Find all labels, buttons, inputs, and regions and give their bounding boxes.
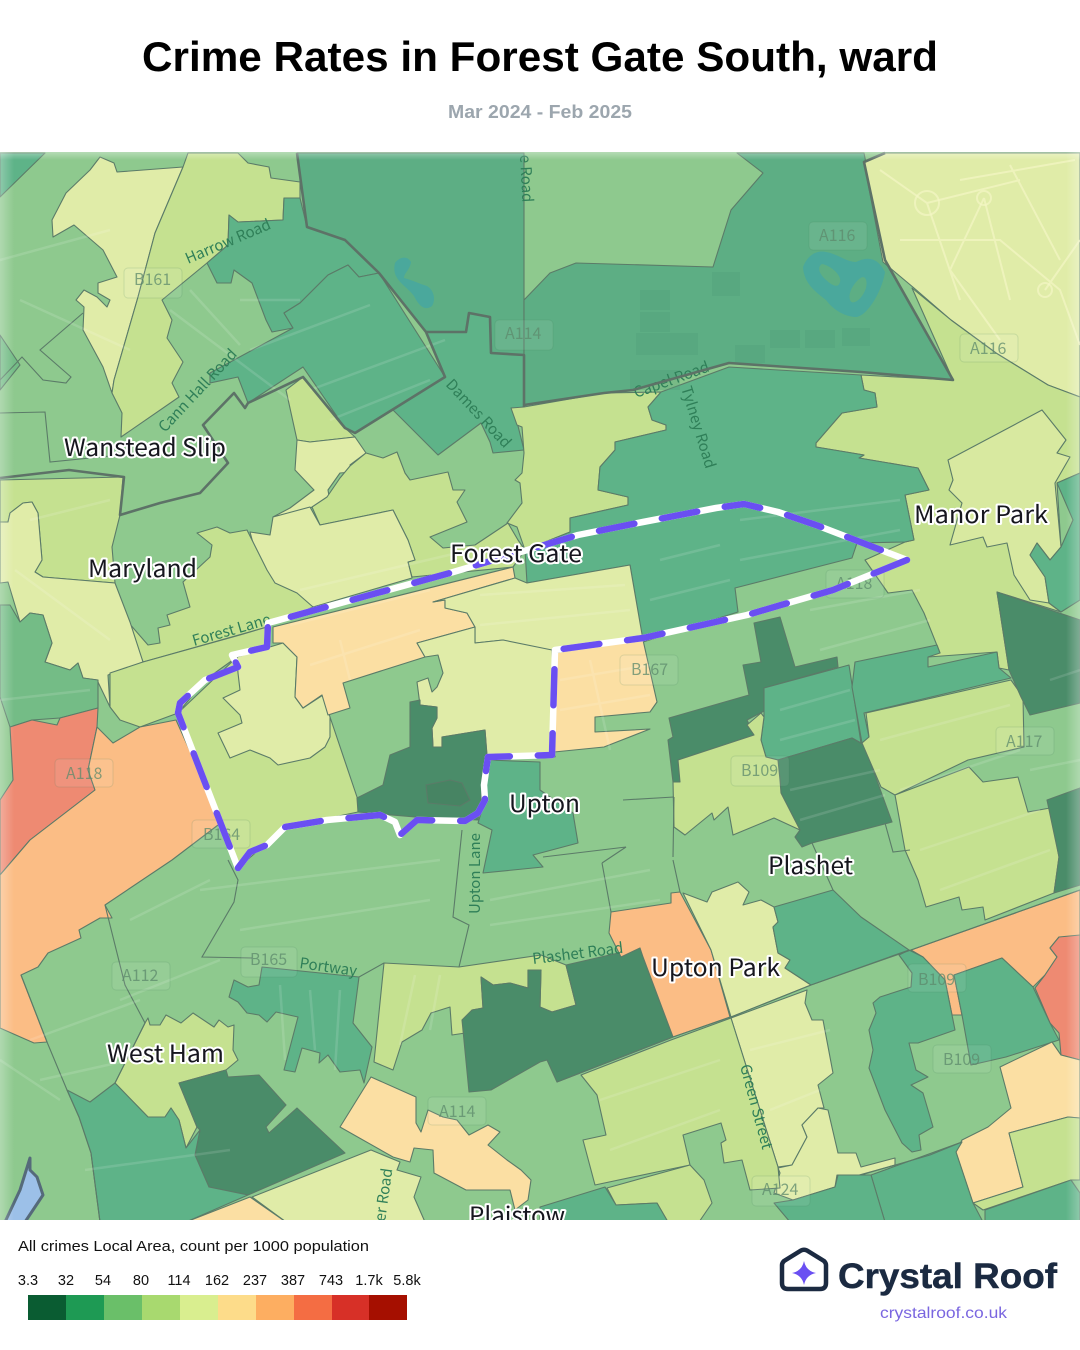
road names: Harrow Road: [182, 214, 274, 269]
date range subtitle: Mar 2024 - Feb 2025: [448, 102, 632, 122]
legend: [18, 1238, 421, 1320]
road badges: A114: [505, 320, 541, 344]
road badges: A117: [1006, 728, 1042, 752]
place labels: Upton Park: [651, 948, 780, 983]
logo: Crystal Roof: [782, 1250, 1057, 1322]
road badges: A116: [970, 335, 1006, 359]
road badges: A112: [122, 962, 158, 986]
icon: park lake: [803, 252, 885, 317]
legend scale values: 114: [167, 1273, 191, 1289]
place labels: Upton: [509, 784, 580, 819]
place labels: Forest Gate: [450, 534, 582, 569]
road badges: B109: [918, 966, 955, 990]
road names: Tylney Road: [676, 383, 721, 471]
road names: Plashet Road: [531, 937, 624, 969]
map: building blocks: [630, 272, 870, 390]
road badges: A114: [439, 1098, 475, 1122]
footer background: [0, 1220, 1080, 1350]
road badges: B164: [203, 821, 240, 845]
place labels: Manor Park: [914, 495, 1048, 530]
website: crystalroof.co.uk: [880, 1305, 1008, 1322]
icon: pond in forest: [394, 258, 434, 308]
road badges: B109: [741, 757, 778, 781]
brand name: Crystal Roof: [838, 1257, 1057, 1296]
legend scale values: 237: [243, 1273, 267, 1289]
road names: Upton Lane: [464, 833, 485, 914]
road badges: A124: [762, 1176, 798, 1200]
place labels: Plashet: [768, 846, 853, 881]
road badges: B167: [631, 656, 668, 680]
map: park path network: [880, 160, 1080, 345]
road names: [153, 154, 778, 1223]
place labels: Maryland: [88, 549, 197, 584]
legend scale values: 5.8k: [393, 1273, 421, 1289]
road badges: B165: [250, 946, 287, 970]
road names: er Road: [369, 1167, 397, 1223]
map edge shading: [0, 152, 1080, 1220]
road names: Forest Lane: [190, 608, 273, 651]
road names: Cann Hall Road: [153, 344, 242, 436]
icon: house with star: [782, 1250, 826, 1289]
road badges: A118: [836, 570, 872, 594]
road names: Portway: [298, 952, 359, 981]
title: Crime Rates in Forest Gate South, ward: [142, 33, 938, 80]
place labels: [64, 428, 1048, 1231]
legend scale values: 54: [95, 1273, 111, 1289]
map: [0, 152, 1080, 1231]
map: additional area borders: [0, 313, 1080, 1222]
legend scale values: 3.3: [18, 1273, 38, 1289]
road badges: A116: [819, 222, 855, 246]
place labels: Wanstead Slip: [64, 428, 226, 463]
legend scale values: 387: [281, 1273, 305, 1289]
legend colour bar: [28, 1295, 407, 1320]
legend scale values: 32: [58, 1273, 74, 1289]
road names: Green Street: [735, 1062, 778, 1152]
road badges: B161: [134, 266, 171, 290]
legend scale values: 162: [205, 1273, 229, 1289]
ward boundary: Forest Gate South: [178, 504, 907, 868]
map: crime-rate choropleth areas: [0, 153, 1080, 1222]
place labels: Plaistow: [469, 1196, 565, 1231]
road names: Capel Road: [631, 356, 712, 403]
road names: e Road: [515, 154, 538, 203]
road badges: [55, 222, 1054, 1206]
place labels: West Ham: [107, 1034, 224, 1069]
road names: Dames Road: [441, 374, 516, 452]
map: borough boundaries: [0, 153, 953, 515]
road badges: B109: [943, 1046, 980, 1070]
legend scale values: 743: [319, 1273, 343, 1289]
map: residential street network: [0, 230, 1080, 1170]
legend scale values: 1.7k: [355, 1273, 383, 1289]
legend scale values: [18, 1273, 421, 1289]
legend scale values: 80: [133, 1273, 149, 1289]
road badges: A118: [66, 760, 102, 784]
legend title: All crimes Local Area, count per 1000 population: [18, 1238, 369, 1255]
